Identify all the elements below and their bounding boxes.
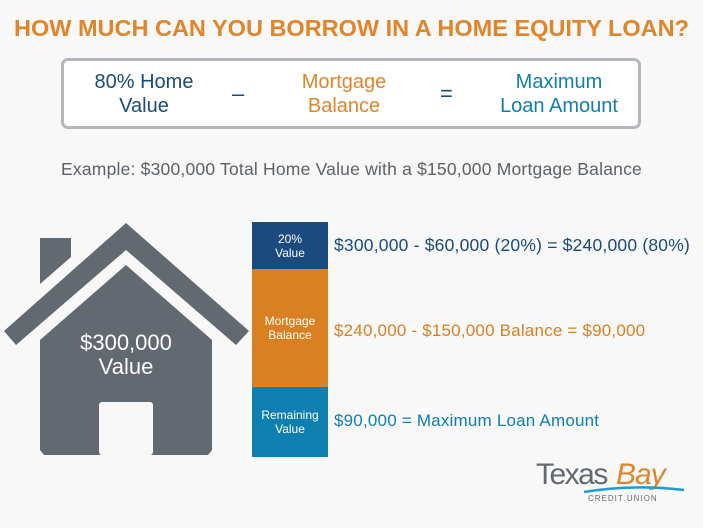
calc line 2: $240,000 - $150,000 Balance = $90,000 [334, 321, 645, 340]
segment: 20% value: 20% [278, 232, 302, 246]
icon: house: $300,000 [80, 330, 172, 355]
term: 80% home value: Value [119, 95, 169, 117]
icon: house [4, 223, 249, 455]
logo: Texas [536, 458, 607, 491]
logo: Bay [616, 458, 665, 491]
term: 80% home value [95, 71, 193, 117]
term: mortgage balance: Balance [308, 95, 380, 117]
term: 80% home value: 80% Home [95, 71, 193, 93]
segment: mortgage balance: Mortgage [265, 314, 315, 328]
segment: 20% value: Value [275, 246, 305, 260]
term: maximum loan amount: Maximum [516, 71, 602, 93]
calc line 3: $90,000 = Maximum Loan Amount [334, 411, 599, 430]
minus sign: – [232, 81, 244, 106]
calc line 1: $300,000 - $60,000 (20%) = $240,000 (80%) [334, 235, 690, 255]
segment: mortgage balance: Balance [268, 328, 312, 342]
term: maximum loan amount [500, 71, 618, 117]
equals sign: = [440, 81, 453, 106]
example text: Example: $300,000 Total Home Value with a $150,000 Mortgage Balance [61, 159, 642, 179]
term: mortgage balance [302, 71, 386, 117]
icon: house: Value [99, 354, 153, 379]
segment: remaining value: Value [275, 422, 305, 436]
segment: mortgage balance [252, 269, 328, 387]
segment: remaining value [252, 387, 328, 457]
segment: remaining value: Remaining [261, 408, 319, 422]
term: mortgage balance: Mortgage [302, 71, 386, 93]
term: maximum loan amount: Loan Amount [500, 95, 618, 117]
logo: CREDIT UNION [588, 494, 658, 503]
segment: 20% value [252, 222, 328, 269]
formula box [61, 58, 641, 129]
title: HOW MUCH CAN YOU BORROW IN A HOME EQUITY LOAN? [14, 15, 689, 41]
logo [536, 458, 684, 503]
stacked bar [252, 222, 328, 457]
